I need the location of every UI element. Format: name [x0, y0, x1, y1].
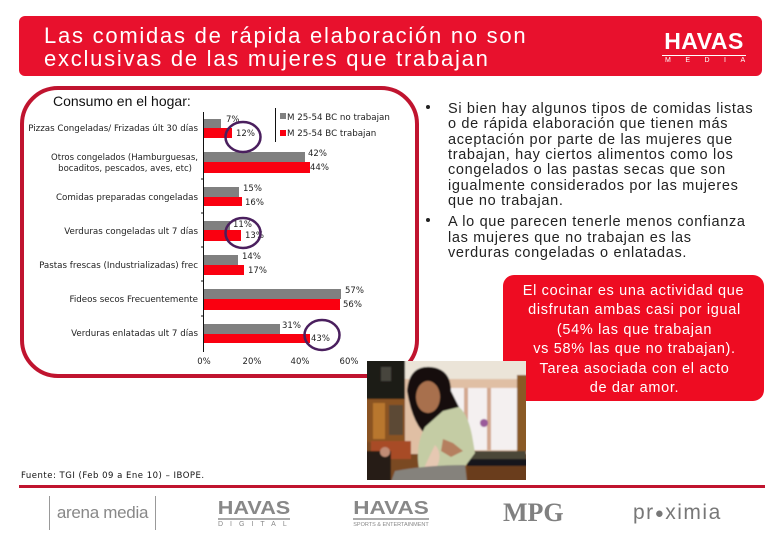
logo: Havas Media: MEDIA [665, 57, 760, 64]
logo: Havas Digital: HAVAS [218, 498, 290, 518]
callout text: El cocinar es una actividad que [523, 283, 744, 299]
bullet 1: Si bien hay algunos tipos de comidas listas [448, 101, 753, 117]
category labels: bocaditos, pescados, aves, etc) [58, 164, 192, 174]
bullet 1: aceptación por parte de las mujeres que [448, 132, 733, 148]
category labels: Comidas preparadas congeladas [56, 193, 198, 203]
callout text: disfrutan ambas casi por igual [528, 302, 741, 318]
bullet 2: A lo que parecen tenerle menos confianza [448, 214, 746, 230]
callout text: (54% las que trabajan [557, 322, 712, 338]
legend: M 25-54 BC no trabajan [287, 113, 390, 123]
callout text: Tarea asociada con el acto [540, 361, 729, 377]
value labels: 31% [282, 321, 301, 331]
title: Las comidas de rápida elaboración no son [44, 23, 527, 48]
chart heading: Consumo en el hogar: [53, 93, 191, 109]
value labels: 42% [308, 149, 327, 159]
x axis labels: 60% [340, 357, 358, 367]
title banner [19, 16, 762, 76]
bullet 2: las mujeres que no trabajan es las [448, 230, 692, 246]
callout [503, 275, 764, 401]
bullet 1 [426, 101, 753, 209]
value labels: 44% [310, 163, 329, 173]
x axis labels: 20% [243, 357, 261, 367]
bullet 1: congelados o las pastas secas que son [448, 162, 726, 178]
value labels: 16% [245, 198, 264, 208]
bullet 1: igualmente considerados por las mujeres [448, 178, 738, 194]
bullet 2 [426, 214, 746, 261]
logo: MPG: MPG [503, 498, 564, 527]
callout text: vs 58% las que no trabajan). [533, 341, 736, 357]
category labels: Verduras enlatadas ult 7 días [71, 329, 198, 339]
value labels: 7% [226, 115, 240, 125]
x axis labels [197, 357, 358, 367]
category labels: Verduras congeladas ult 7 días [64, 227, 198, 237]
bullet 1: que no trabajan. [448, 193, 564, 209]
bullet list [426, 101, 753, 261]
logo: Havas Sports & Entertainment: HAVAS [353, 498, 429, 518]
logo: arena media [49, 496, 156, 530]
category labels: Pastas frescas (Industrializadas) frec [39, 261, 198, 271]
highlight circles [226, 122, 340, 350]
callout text [523, 283, 744, 396]
category labels: Fideos secos Frecuentemente [69, 295, 198, 305]
red bars: trabajan [204, 128, 340, 343]
photo: woman cooking [367, 361, 526, 480]
value labels: 56% [343, 300, 362, 310]
category labels: Pizzas Congeladas/ Frizadas últ 30 días [28, 124, 198, 134]
logo: Proximia: pr●ximia [633, 501, 722, 524]
value labels [226, 115, 364, 344]
logo: Havas Media [662, 28, 760, 64]
gray bars: no trabajan [204, 119, 341, 334]
category labels [28, 124, 198, 339]
logo: Havas Digital [218, 498, 294, 528]
bullet 1: trabajan, hay ciertos alimentos como los [448, 147, 734, 163]
x axis labels: 0% [197, 357, 211, 367]
value labels: 12% [236, 129, 255, 139]
logo: Havas Media: HAVAS [664, 28, 744, 54]
title [44, 23, 527, 71]
axis [201, 108, 276, 352]
logo: Havas Sports & Entertainment [353, 498, 429, 528]
value labels: 14% [242, 252, 261, 262]
title: exclusivas de las mujeres que trabajan [44, 46, 490, 71]
bullet 2: verduras congeladas o enlatadas. [448, 245, 687, 261]
legend [280, 113, 390, 139]
value labels: 17% [248, 266, 267, 276]
bullet 1: o de rápida elaboración que tienen más [448, 116, 728, 132]
callout text: de dar amor. [590, 380, 679, 396]
x axis labels: 40% [291, 357, 309, 367]
category labels: Otros congelados (Hamburguesas, [51, 153, 198, 163]
value labels: 43% [311, 334, 330, 344]
logo: arena media: arena media [57, 503, 148, 522]
legend: M 25-54 BC trabajan [287, 129, 376, 139]
logo: Havas Sports & Entertainment: SPORTS & ENTERTAINMENT [353, 522, 429, 528]
value labels: 11% [233, 220, 252, 230]
panel: chart frame [20, 86, 419, 378]
source note: Fuente: TGI (Feb 09 a Ene 10) – IBOPE. [21, 471, 205, 481]
value labels: 15% [243, 184, 262, 194]
value labels: 57% [345, 286, 364, 296]
value labels: 13% [245, 231, 264, 241]
footer rule [19, 485, 765, 488]
logo: Havas Digital: DIGITAL [218, 521, 294, 528]
